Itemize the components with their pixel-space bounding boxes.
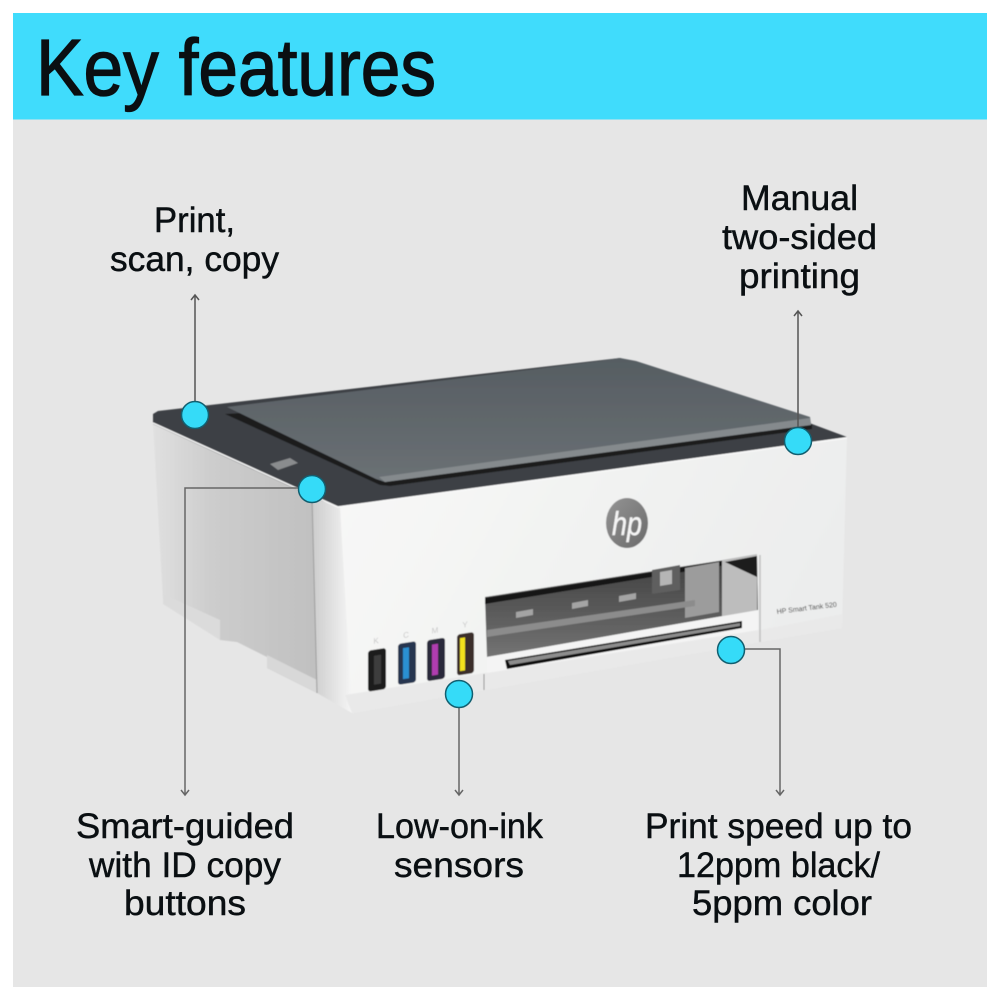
- corner seam: [312, 497, 317, 693]
- cyan tank: C: [403, 630, 409, 640]
- printer illustration: [153, 358, 847, 713]
- scanner lid front edge: [379, 418, 811, 482]
- front corner panel: [312, 496, 352, 713]
- label: sensors: [394, 846, 524, 885]
- marker: [298, 476, 326, 502]
- arrow: print scan copy: [191, 295, 199, 402]
- callout: low-on-ink sensors: [376, 680, 553, 885]
- marker: [446, 680, 472, 708]
- callout: manual two-sided printing: [722, 179, 887, 454]
- HP logo: [606, 498, 648, 548]
- front foot strip: [267, 655, 317, 693]
- arrow: two-sided: [794, 311, 802, 428]
- label: printing: [739, 257, 860, 296]
- label: with ID copy: [88, 846, 281, 885]
- ink tanks: [368, 620, 474, 692]
- output tray lip: [487, 610, 758, 673]
- title: Key features: [36, 23, 436, 112]
- model label: HP Smart Tank 520: [776, 602, 837, 616]
- paper output opening: [485, 554, 758, 657]
- white edge of top plate: [153, 423, 847, 507]
- label: Smart-guided: [76, 807, 294, 846]
- black tank: K: [373, 636, 379, 646]
- body seams: [483, 674, 485, 690]
- output slot: [505, 621, 742, 669]
- callout: smart-guided buttons: [76, 476, 326, 923]
- label: buttons: [124, 884, 246, 923]
- label: Print speed up to: [645, 807, 912, 846]
- label: Print,: [154, 201, 235, 240]
- label: scan, copy: [110, 240, 280, 279]
- arrow: print speed: [744, 649, 784, 795]
- callout: print, scan, copy: [110, 201, 280, 428]
- arrow: smart-guided: [181, 488, 299, 795]
- control panel buttons: [270, 458, 298, 470]
- scanner lid shadow: [225, 400, 812, 486]
- label: Manual: [741, 179, 858, 218]
- header band: [13, 13, 987, 120]
- magenta tank: M: [432, 626, 439, 636]
- bottom front lip: [345, 614, 842, 713]
- marker: [182, 402, 208, 428]
- callout: print speed: [645, 636, 922, 923]
- printer front: [340, 437, 847, 713]
- arrow: low-on-ink: [455, 707, 463, 795]
- yellow tank: Y: [462, 620, 468, 630]
- scanner lid: [227, 358, 811, 482]
- dark top plate: [153, 358, 847, 507]
- label: 5ppm color: [692, 884, 872, 923]
- label: two-sided: [722, 218, 877, 257]
- label: Low-on-ink: [376, 807, 543, 846]
- HP logo: hp: [612, 505, 642, 542]
- label: 12ppm black/: [677, 846, 880, 885]
- marker: [784, 428, 812, 454]
- marker: [718, 636, 744, 664]
- printer left side: [153, 424, 317, 693]
- rear foot strip: [163, 594, 220, 640]
